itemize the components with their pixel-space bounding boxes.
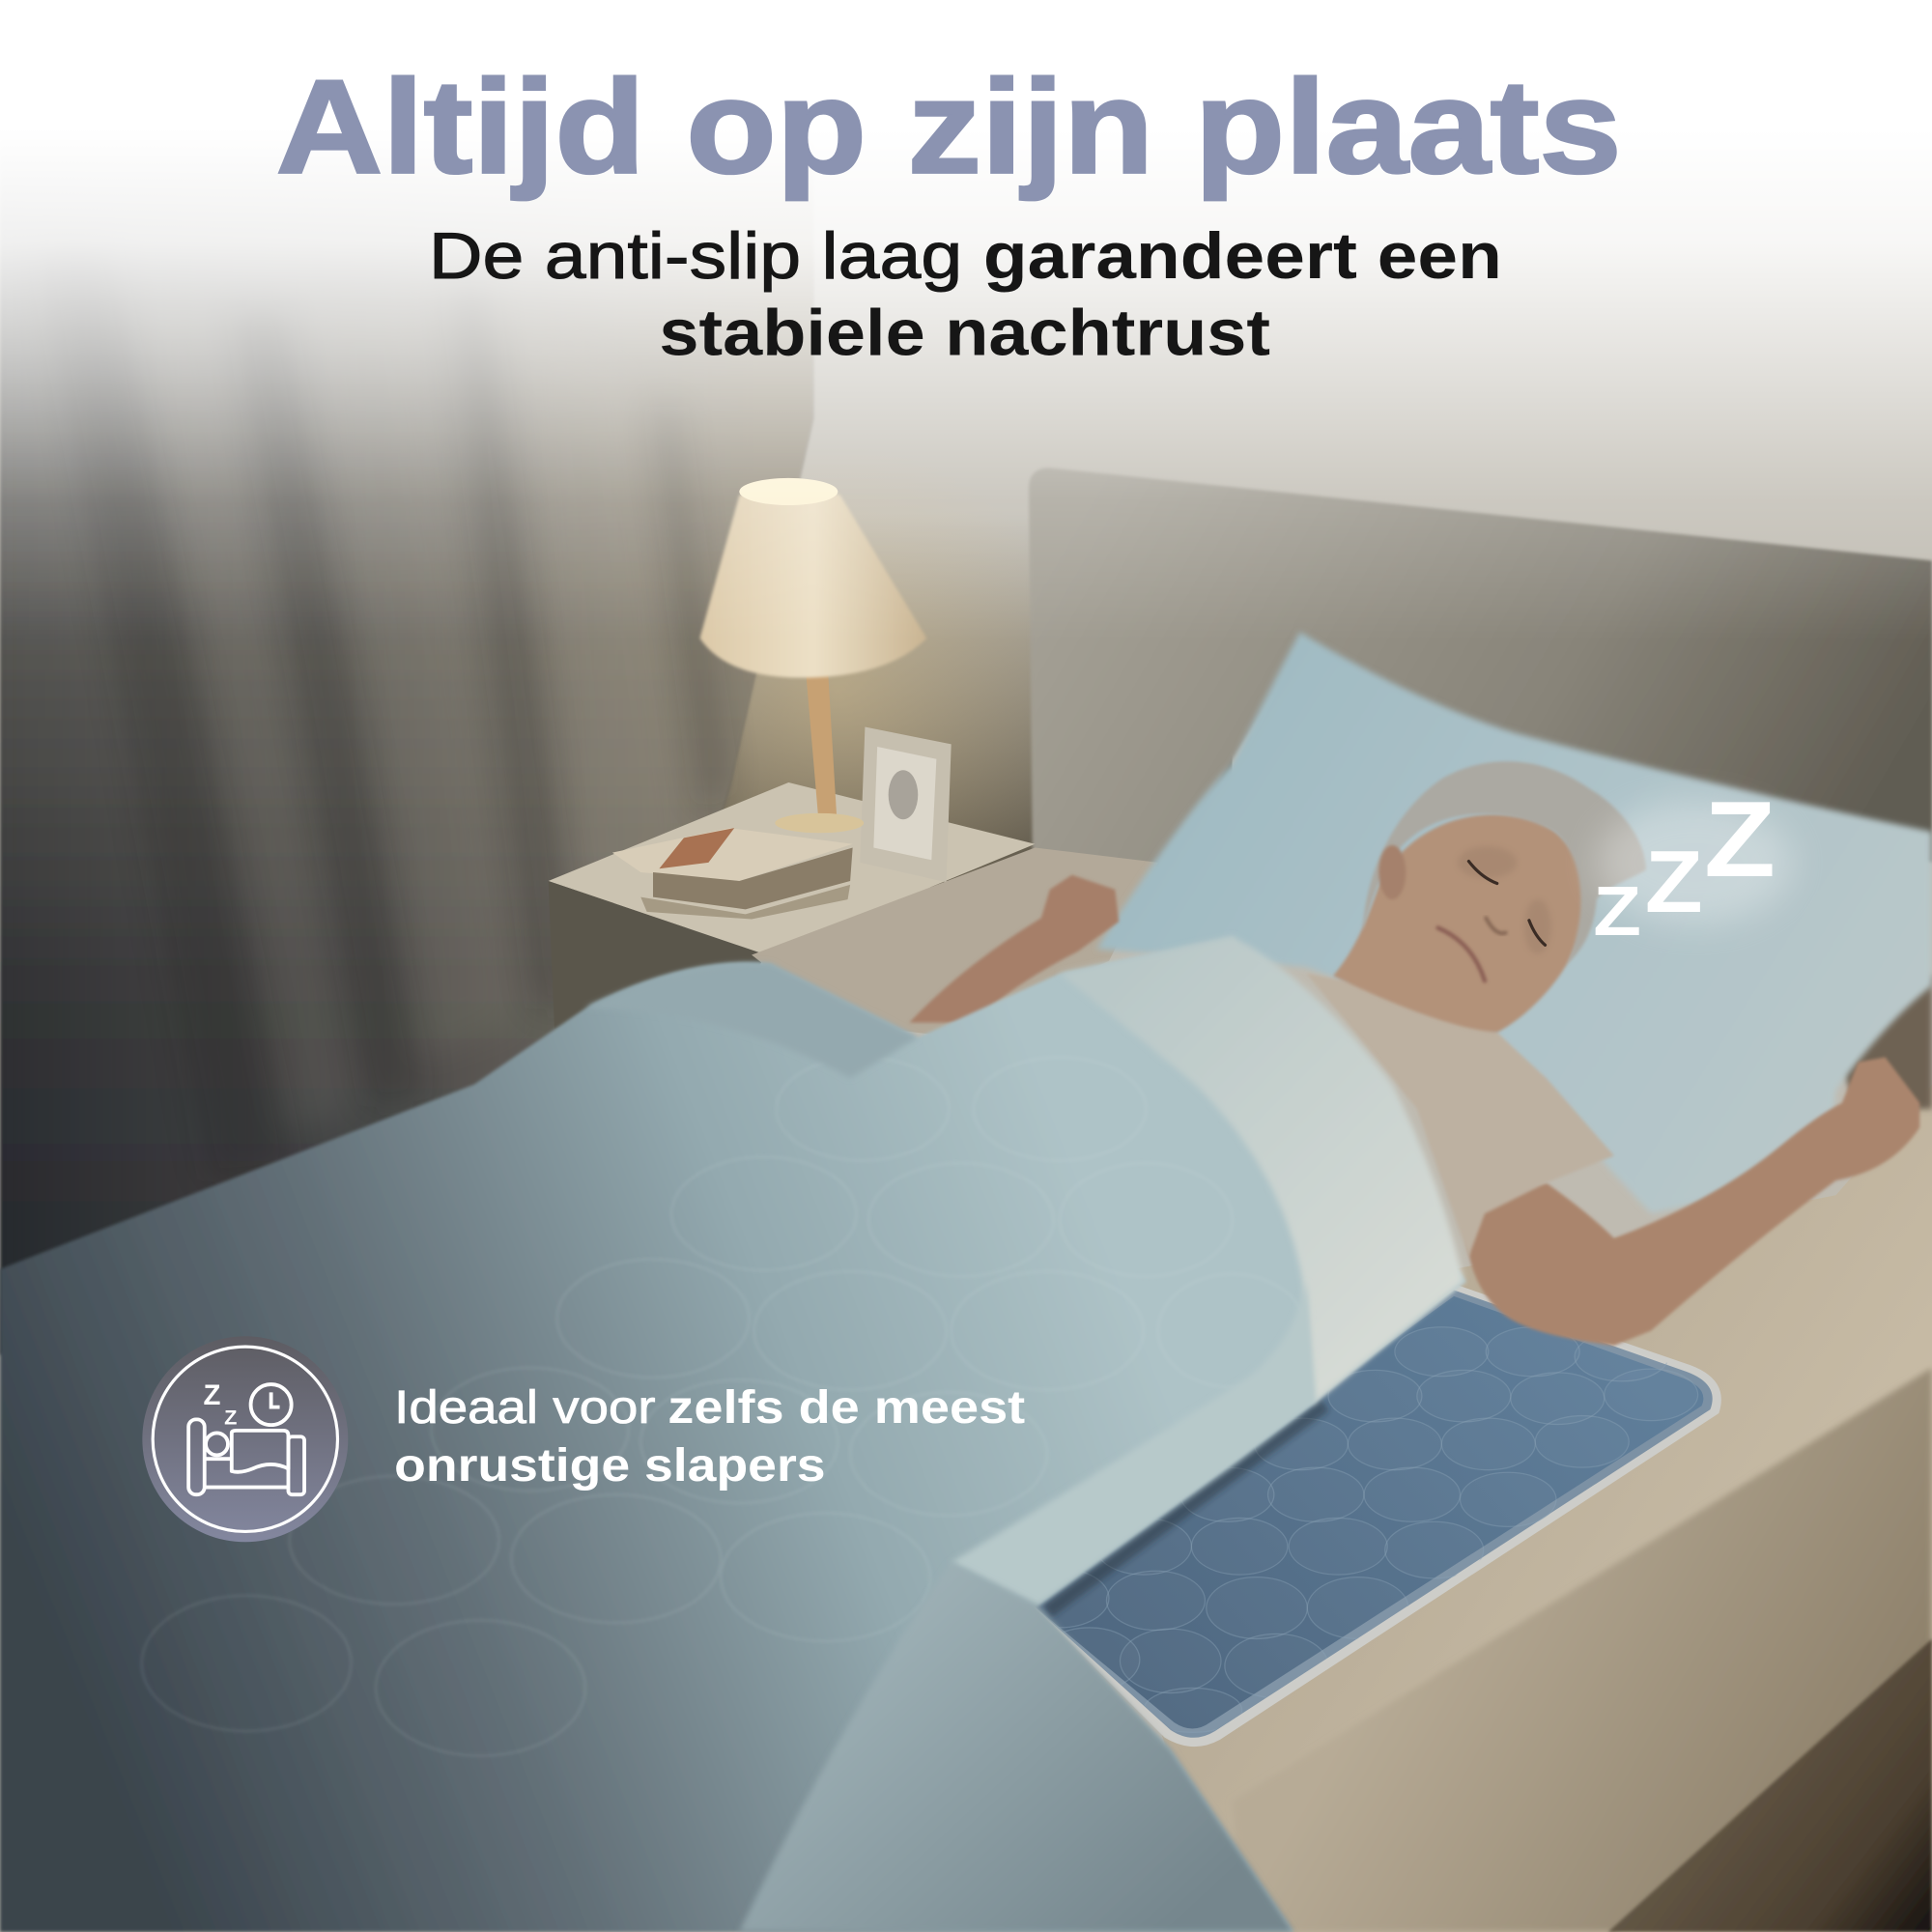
subtitle [429,220,1502,369]
icon badge: sleeping person with clock [142,1336,348,1542]
woman's shirt [1306,974,1614,1257]
icon: small z letters [203,1379,237,1429]
books [612,828,853,920]
subtitle: stabiele nachtrust [659,297,1270,369]
icon: small z letters: Z [224,1405,237,1429]
woman's head [1333,761,1646,1033]
caption text: zelfs de meest [668,1381,1025,1434]
sleeping zzz: Z [1645,834,1703,931]
table lamp [699,478,926,833]
folded-back white duvet [1060,936,1463,1405]
caption text [394,1381,1025,1492]
protective mat [1010,1284,1721,1747]
headboard [1029,468,1932,887]
picture frame [860,727,952,882]
quilted circles [1010,1327,1698,1732]
white fade at the top [0,0,1932,640]
nightstand with books and frame [549,727,1035,1029]
quilting pattern [142,1057,1306,1756]
mattress [752,848,1932,1932]
curtain [0,0,813,1355]
caption text: onrustige slapers [394,1439,826,1492]
woman's right arm and hand [1466,1057,1919,1346]
pillow [1096,632,1932,1213]
caption text: Ideaal voor [394,1381,656,1434]
sleeping zzz [1593,780,1793,951]
sleeping zzz: Z [1704,780,1776,899]
hair [1363,761,1646,963]
wall behind lamp [666,370,1233,887]
sleeping zzz: Z [1593,872,1641,951]
blanket [0,936,1466,1932]
icon: clock [251,1384,292,1425]
upper-left blanket hump [585,963,918,1078]
lower duvet flap [739,1562,1293,1932]
closed eyes, nose and mouth [1438,846,1551,980]
duvet band [952,1282,1316,1605]
subtitle: De anti-slip laag [429,220,962,293]
icon: small z letters: Z [203,1379,220,1411]
subtitle: garandeert een [983,220,1502,293]
title: Altijd op zijn plaats [276,53,1622,202]
woman's left arm and hand [909,875,1119,1023]
icon: bed [188,1419,304,1494]
ear [1378,845,1406,899]
